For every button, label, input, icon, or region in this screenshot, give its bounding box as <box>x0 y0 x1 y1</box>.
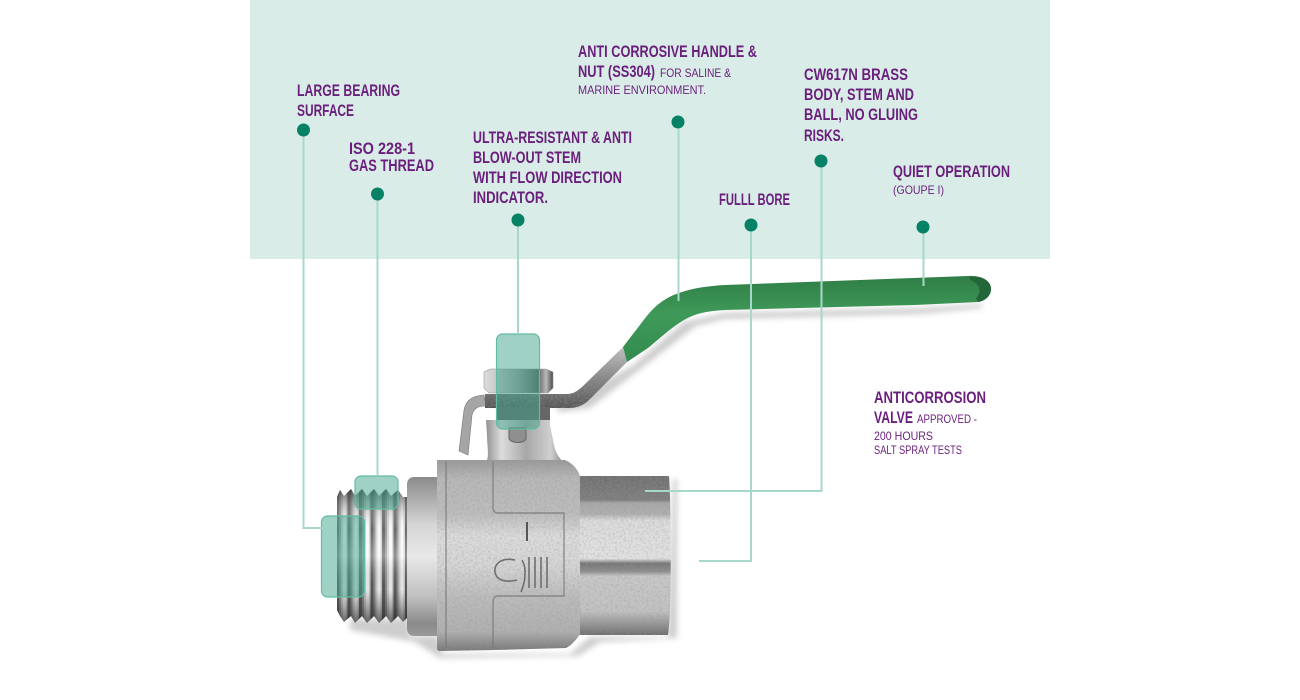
label: anticorrosion valve: APPROVED - <box>917 412 977 426</box>
label: stem <box>473 129 632 207</box>
hex nut <box>484 369 553 393</box>
valve illustration <box>322 276 991 658</box>
label: stem: INDICATOR. <box>473 189 548 207</box>
label: full bore: FULLL BORE <box>719 191 790 209</box>
central valve body <box>437 460 580 651</box>
hex collar <box>407 477 437 636</box>
label: anti corrosive handle: NUT (SS304) <box>578 63 655 81</box>
label: gas thread <box>349 140 434 175</box>
handle tip shading <box>970 277 991 302</box>
stem under the nut <box>497 407 550 420</box>
neck of the valve <box>485 407 567 475</box>
size mark on the body <box>526 522 528 541</box>
male thread <box>337 489 407 623</box>
label: quiet operation: QUIET OPERATION <box>893 163 1010 181</box>
label: brass body: BODY, STEM AND <box>804 86 914 104</box>
handle steel section <box>485 347 627 408</box>
callout lines <box>304 122 924 561</box>
label: gas thread: GAS THREAD <box>349 157 434 175</box>
label: brass body <box>804 66 918 145</box>
label: quiet operation: (GOUPE I) <box>893 183 944 197</box>
label: stem: ULTRA-RESISTANT & ANTI <box>473 129 632 147</box>
label: anticorrosion valve: VALVE <box>874 409 913 427</box>
label: stem: WITH FLOW DIRECTION <box>473 169 622 187</box>
label: anti corrosive handle: ANTI CORROSIVE HANDLE & <box>578 43 757 61</box>
label: large bearing surface <box>297 82 400 120</box>
label: quiet operation <box>893 163 1010 197</box>
label: anticorrosion valve <box>874 389 986 457</box>
label: large bearing surface: LARGE BEARING <box>297 82 400 100</box>
label: large bearing surface: SURFACE <box>297 102 354 120</box>
valve shadow <box>350 304 982 658</box>
label: anticorrosion valve: ANTICORROSION <box>874 389 986 407</box>
raised body block lines <box>446 462 564 648</box>
indicator on the neck <box>509 428 526 442</box>
highlight: stem <box>496 334 540 429</box>
label: anti corrosive handle: MARINE ENVIRONMENT. <box>578 83 706 97</box>
label: stem: BLOW-OUT STEM <box>473 149 581 167</box>
label: anti corrosive handle: FOR SALINE & <box>660 66 731 80</box>
maker logo embossed on the body <box>495 557 547 592</box>
handle lever tab <box>459 395 486 455</box>
right socket end <box>575 476 671 635</box>
label: brass body: BALL, NO GLUING <box>804 106 918 124</box>
callout dots <box>297 116 930 234</box>
label: anti corrosive handle <box>578 43 757 97</box>
panel: mint header background <box>250 0 1050 259</box>
label: anticorrosion valve: SALT SPRAY TESTS <box>874 443 962 457</box>
label: brass body: RISKS. <box>804 127 844 145</box>
green handle grip <box>623 276 991 362</box>
highlight: bearing surface <box>322 516 364 597</box>
label: brass body: CW617N BRASS <box>804 66 908 84</box>
label: gas thread: ISO 228-1 <box>349 140 415 158</box>
highlight: gas thread <box>355 476 398 509</box>
label: anticorrosion valve: 200 HOURS <box>874 429 933 443</box>
